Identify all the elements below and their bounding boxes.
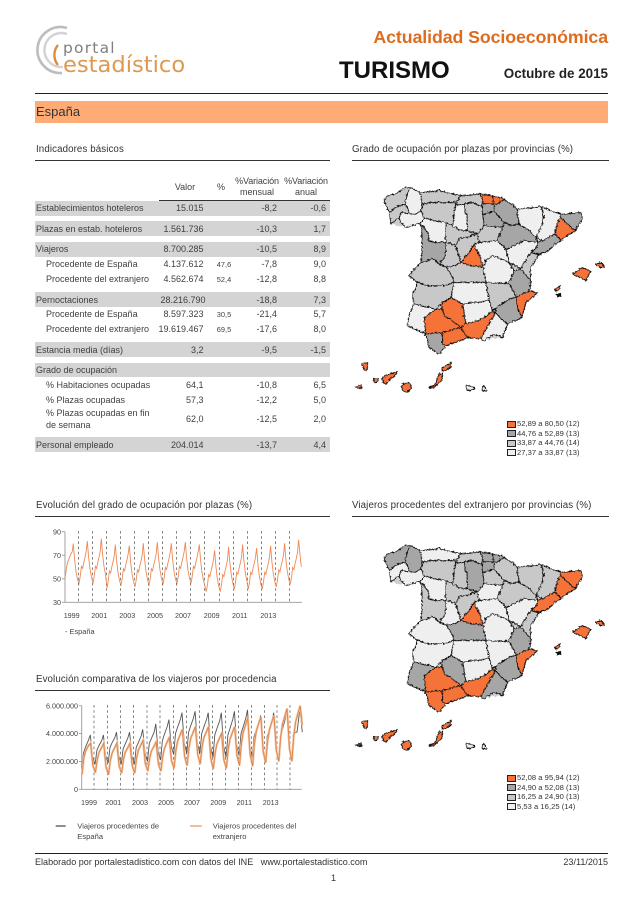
panel: table of basic indicators: 204.014	[171, 440, 204, 450]
panel: table of basic indicators: 69,5	[217, 324, 231, 334]
panel: table of basic indicators: -10,8	[256, 380, 277, 390]
title: Actualidad Socioeconómica: Actualidad Socioeconómica	[373, 27, 608, 47]
line chart: travellers by origin: 2009	[210, 798, 226, 807]
panel: table of basic indicators: -9,5	[261, 345, 277, 355]
panel: table of basic indicators: 19.619.467	[158, 324, 204, 334]
panel: table of basic indicators: % Plazas ocupadas	[46, 395, 125, 405]
legend: occupancy map: 52,89 a 80,50 (12)	[517, 419, 580, 428]
heading: Viajeros procedentes del extranjero: Viajeros procedentes del extranjero por provincias (%)	[352, 500, 591, 511]
panel: table of basic indicators: Procedente de España	[46, 309, 138, 319]
panel: table of basic indicators	[35, 176, 330, 452]
panel: table of basic indicators: % Habitaciones ocupadas	[46, 380, 150, 390]
panel: table of basic indicators: de semana	[46, 420, 91, 430]
line chart: travellers by origin	[46, 701, 304, 841]
map: foreign travellers by province	[354, 544, 605, 751]
panel: table of basic indicators: anual	[295, 187, 317, 197]
heading: Grado de ocupación por plazas por provincias: Grado de ocupación por plazas por provincias (%)	[352, 144, 573, 155]
panel: table of basic indicators: Valor	[175, 182, 195, 192]
line chart: travellers by origin: 2005	[158, 798, 174, 807]
panel: table of basic indicators: 5,7	[313, 309, 326, 319]
line chart: occupancy evolution: 90	[53, 528, 61, 536]
line chart: occupancy evolution: 2007	[175, 611, 191, 620]
section band: España: España	[36, 104, 80, 119]
date: Octubre de 2015	[504, 66, 608, 81]
line chart: occupancy evolution: 2011	[232, 611, 247, 620]
panel: table of basic indicators: 5,0	[313, 395, 326, 405]
line chart: travellers by origin: 2.000.000	[46, 757, 78, 766]
panel: table of basic indicators: -12,5	[256, 414, 277, 424]
panel: table of basic indicators: Procedente del extranjero	[46, 274, 149, 284]
panel: table of basic indicators: %Variación	[235, 176, 279, 186]
legend: occupancy map: 44,76 a 52,89 (13)	[517, 428, 580, 438]
panel: table of basic indicators: -7,8	[261, 259, 277, 269]
logo: portal estadístico	[36, 26, 185, 78]
panel: table of basic indicators: 6,5	[313, 380, 326, 390]
panel: table of basic indicators: 52,4	[217, 274, 231, 284]
panel: table of basic indicators: -12,8	[256, 274, 277, 284]
line chart: occupancy evolution: 2009	[204, 611, 220, 620]
line chart: travellers by origin: 2001	[105, 798, 121, 807]
panel: table of basic indicators: 1,7	[313, 224, 326, 234]
heading: Indicadores básicos: Indicadores básicos	[36, 144, 124, 155]
line chart: occupancy evolution: 70	[53, 551, 61, 560]
line chart: travellers by origin: 2011	[237, 798, 252, 807]
panel: table of basic indicators: 62,0	[186, 414, 204, 424]
panel: table of basic indicators: -10,5	[256, 244, 277, 254]
panel: table of basic indicators: 3,2	[191, 345, 204, 355]
legend: foreign travellers map: 24,90 a 52,08 (13)	[517, 782, 580, 792]
line chart: occupancy evolution: 1999	[64, 611, 80, 620]
legend: foreign travellers map: 16,25 a 24,90 (13)	[517, 792, 580, 801]
heading: Evolución del grado de ocupación: Evolución del grado de ocupación por plazas (%)	[36, 500, 252, 511]
panel: table of basic indicators: Personal empleado	[36, 440, 114, 450]
line chart: travellers by origin: 2003	[132, 798, 148, 807]
panel: table of basic indicators: 4.562.674	[163, 274, 204, 284]
panel: table of basic indicators: -0,6	[310, 203, 326, 213]
panel: table of basic indicators: %Variación	[284, 176, 328, 186]
line chart: travellers by origin: 2007	[184, 798, 200, 807]
panel: table of basic indicators: -10,3	[256, 224, 277, 234]
logo: portal estadístico: portal	[63, 39, 116, 57]
line chart: travellers by origin: extranjero	[213, 832, 246, 841]
line chart: travellers by origin: 0	[74, 785, 78, 794]
panel: table of basic indicators: Establecimientos hoteleros	[36, 203, 144, 213]
legend: occupancy map: 33,87 a 44,76 (14)	[517, 438, 580, 447]
line chart: travellers by origin: 4.000.000	[46, 729, 78, 738]
panel: table of basic indicators: -8,2	[261, 203, 277, 213]
panel: table of basic indicators: 7,3	[313, 295, 326, 305]
panel: table of basic indicators: -17,6	[256, 324, 277, 334]
panel: table of basic indicators: 8,9	[313, 244, 326, 254]
panel: table of basic indicators: 15.015	[176, 203, 204, 213]
line chart: travellers by origin: 6.000.000	[46, 701, 78, 710]
panel: table of basic indicators: 8,8	[313, 274, 326, 284]
panel: table of basic indicators: 8.597.323	[163, 309, 204, 319]
panel: table of basic indicators: Grado de ocupación	[36, 365, 117, 375]
panel: table of basic indicators: %	[217, 182, 225, 192]
panel: table of basic indicators: 9,0	[313, 259, 326, 269]
line chart: occupancy evolution: 2013	[260, 611, 276, 620]
line chart: occupancy evolution: 30	[53, 598, 61, 607]
map: occupancy by province	[354, 186, 605, 393]
heading: TURISMO: TURISMO	[339, 57, 450, 84]
panel: table of basic indicators: 4.137.612	[163, 259, 204, 269]
panel: table of basic indicators: 1.561.736	[163, 224, 204, 234]
panel: table of basic indicators: 30,5	[217, 310, 231, 318]
panel: table of basic indicators: -12,2	[256, 395, 277, 405]
panel: table of basic indicators: 2,0	[313, 414, 326, 424]
panel: table of basic indicators: 28.216.790	[160, 295, 206, 305]
line chart: occupancy evolution	[53, 528, 302, 636]
line chart: occupancy evolution: - España	[65, 627, 95, 636]
panel: table of basic indicators: -21,4	[256, 309, 277, 319]
line chart: occupancy evolution: 2005	[147, 611, 163, 620]
section band: España	[35, 101, 608, 122]
line chart: travellers by origin: 1999	[81, 798, 97, 807]
panel: table of basic indicators: 8,0	[313, 324, 326, 334]
footer: date: 23/11/2015	[563, 857, 608, 867]
line chart: occupancy evolution: 2001	[91, 611, 107, 620]
panel: table of basic indicators: 8.700.285	[163, 244, 204, 254]
panel: table of basic indicators: mensual	[240, 187, 274, 197]
panel: table of basic indicators: -18,8	[256, 295, 277, 305]
line chart: travellers by origin: 2013	[263, 798, 279, 807]
panel: table of basic indicators: -1,5	[310, 345, 326, 355]
heading: Evolución comparativa: Evolución comparativa de los viajeros por procedencia	[36, 674, 277, 685]
legend: foreign travellers map	[507, 773, 580, 810]
panel: table of basic indicators: 57,3	[186, 395, 204, 405]
panel: table of basic indicators: Procedente de España	[46, 259, 138, 269]
line chart: occupancy evolution: 50	[53, 574, 61, 584]
panel: table of basic indicators: Estancia media (días)	[36, 345, 123, 355]
panel: table of basic indicators: Plazas en estab. hoteleros	[36, 224, 142, 234]
panel: table of basic indicators: Procedente del extranjero	[46, 324, 149, 334]
line chart: occupancy evolution: 2003	[119, 611, 135, 620]
legend: foreign travellers map: 5,53 a 16,25 (14)	[517, 802, 575, 810]
panel: table of basic indicators: Pernoctaciones	[36, 295, 98, 305]
panel: table of basic indicators: 4,4	[313, 440, 326, 450]
panel: table of basic indicators: -13,7	[256, 440, 277, 450]
page number: 1	[331, 873, 336, 883]
panel: table of basic indicators: 47,6	[217, 260, 231, 268]
line chart: travellers by origin: Viajeros procedentes del	[213, 822, 296, 831]
line chart: travellers by origin: España	[77, 832, 104, 841]
legend: occupancy map: 27,37 a 33,87 (13)	[517, 448, 580, 456]
panel: table of basic indicators: % Plazas ocupadas en fin	[46, 408, 150, 418]
legend: occupancy map	[507, 419, 580, 456]
legend: foreign travellers map: 52,08 a 95,94 (12)	[517, 773, 580, 782]
logo: portal estadístico: estadístico	[63, 52, 185, 78]
line chart: travellers by origin: Viajeros procedentes de	[77, 822, 159, 831]
footer: source: Elaborado por portalestadistico.com con datos del INE www.portalestadistico.com	[35, 857, 367, 867]
panel: table of basic indicators: Viajeros	[36, 244, 68, 254]
panel: table of basic indicators: 64,1	[186, 380, 204, 390]
